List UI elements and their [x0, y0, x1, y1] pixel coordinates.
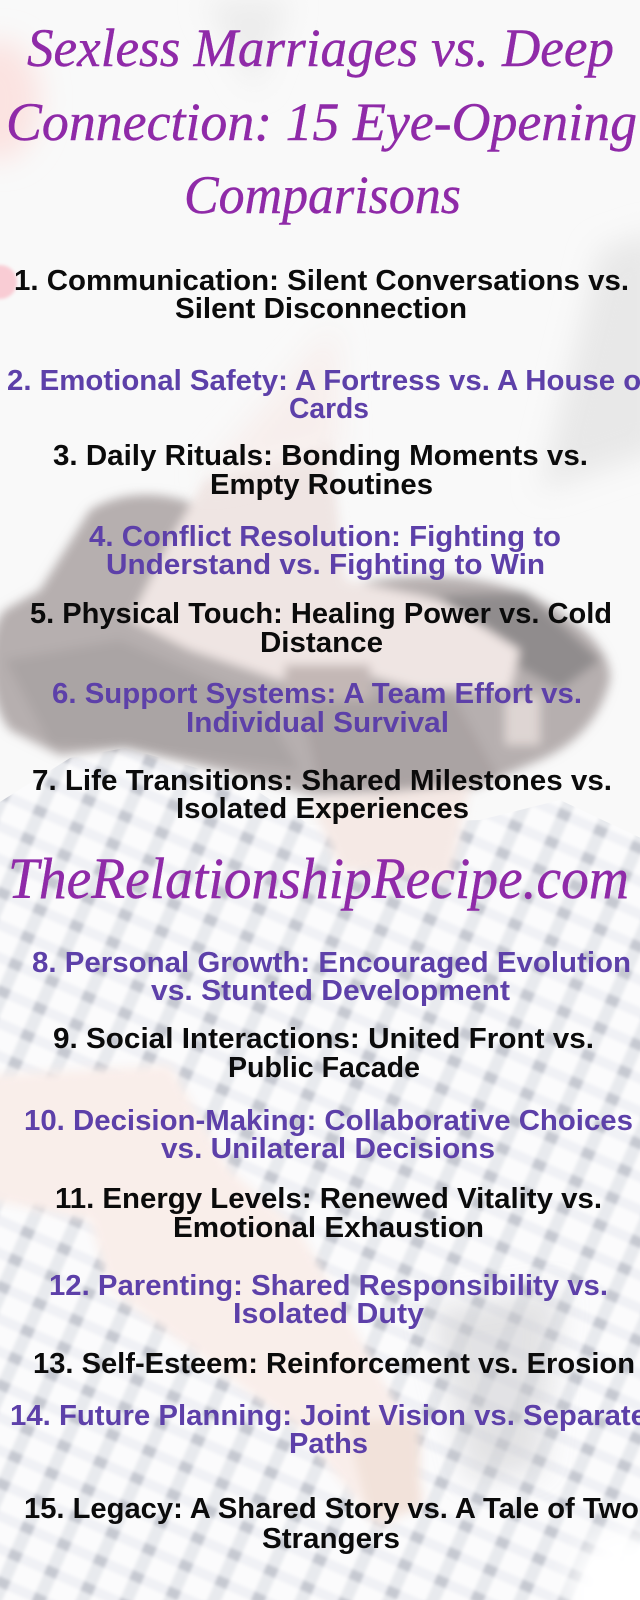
hair and head [0, 495, 610, 795]
title [6, 18, 637, 225]
item 15: Strangers [262, 1523, 400, 1555]
item 6: 6. Support Systems: A Team Effort vs. [52, 678, 582, 710]
item 3: Empty Routines [210, 469, 433, 501]
pink dot at left edge [0, 265, 17, 299]
item 14: 14. Future Planning: Joint Vision vs. Separate [10, 1400, 640, 1432]
item 4: Understand vs. Fighting to Win [106, 549, 545, 581]
title: Comparisons [184, 165, 461, 225]
neck [310, 785, 470, 880]
item 14 [10, 1400, 640, 1460]
item 3: 3. Daily Rituals: Bonding Moments vs. [53, 440, 588, 472]
item 12: Isolated Duty [233, 1298, 424, 1330]
item 1: 1. Communication: Silent Conversations vs. [14, 265, 629, 297]
item 8: 8. Personal Growth: Encouraged Evolution [32, 947, 631, 979]
item 5 [30, 598, 612, 659]
item 8 [32, 947, 631, 1007]
title: Connection: 15 Eye-Opening [6, 92, 637, 152]
item 2: 2. Emotional Safety: A Fortress vs. A House of [7, 365, 640, 397]
title: Sexless Marriages vs. Deep [27, 18, 614, 78]
item 2: Cards [289, 393, 369, 425]
item 5: 5. Physical Touch: Healing Power vs. Cold [30, 598, 612, 630]
item 11: Emotional Exhaustion [173, 1212, 484, 1244]
faces [130, 440, 520, 690]
item 1: Silent Disconnection [175, 293, 467, 325]
item 4: 4. Conflict Resolution: Fighting to [89, 521, 561, 553]
item 9: Public Facade [228, 1052, 420, 1084]
item 7 [32, 765, 612, 825]
item 5: Distance [260, 627, 383, 659]
item 10: vs. Unilateral Decisions [161, 1133, 495, 1165]
item 11 [55, 1183, 602, 1244]
item 10: 10. Decision-Making: Collaborative Choices [24, 1105, 633, 1137]
item 1 [14, 265, 629, 325]
website name: TheRelationshipRecipe.com [8, 846, 629, 911]
item 12: 12. Parenting: Shared Responsibility vs. [49, 1270, 608, 1302]
item 10 [24, 1105, 633, 1165]
item 15 [24, 1493, 639, 1555]
item 6: Individual Survival [186, 707, 449, 739]
item 15: 15. Legacy: A Shared Story vs. A Tale of Two [24, 1493, 639, 1525]
hand and forearm [0, 1065, 425, 1530]
item 9: 9. Social Interactions: United Front vs. [53, 1023, 594, 1055]
item 4 [89, 521, 561, 581]
item 14: Paths [289, 1428, 368, 1460]
item 7: 7. Life Transitions: Shared Milestones vs. [32, 765, 612, 797]
item 13: 13. Self-Esteem: Reinforcement vs. Erosion [33, 1348, 635, 1380]
item 9 [53, 1023, 594, 1084]
item 7: Isolated Experiences [176, 793, 469, 825]
item 8: vs. Stunted Development [151, 975, 511, 1007]
shirt plaid [0, 690, 640, 1600]
item 12 [49, 1270, 608, 1330]
item 6 [52, 678, 582, 739]
pale forehead wedge [200, 325, 340, 480]
item 3 [53, 440, 588, 501]
item 11: 11. Energy Levels: Renewed Vitality vs. [55, 1183, 602, 1215]
item 2 [7, 365, 640, 425]
